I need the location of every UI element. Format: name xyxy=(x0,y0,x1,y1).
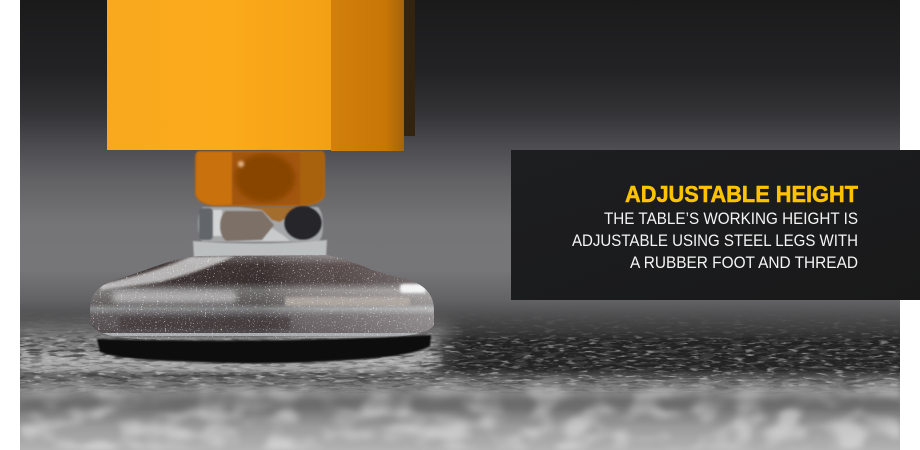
foot band dark lower left xyxy=(120,317,290,329)
table leg: yellow square tube xyxy=(107,0,415,151)
yellow tube front face xyxy=(107,0,331,150)
foot shoulder snow xyxy=(100,256,235,290)
body text xyxy=(572,210,858,272)
grey washer xyxy=(192,239,328,256)
foot rim highlight right xyxy=(285,297,410,306)
body text: THE TABLE’S WORKING HEIGHT IS xyxy=(604,210,858,228)
text panel xyxy=(511,150,920,300)
body text: A RUBBER FOOT AND THREAD xyxy=(630,254,858,272)
yellow tube side face xyxy=(331,0,404,151)
black rubber pad xyxy=(97,335,431,364)
lower steel hex nut xyxy=(198,206,323,242)
mat surface xyxy=(20,314,900,450)
dust on foot xyxy=(90,255,434,339)
steel foot base xyxy=(90,255,434,339)
foot rim highlight left xyxy=(112,291,237,303)
upper orange hex nut xyxy=(195,151,325,206)
sand line along pad xyxy=(20,356,420,372)
body text: ADJUSTABLE USING STEEL LEGS WITH xyxy=(572,232,858,250)
heading: ADJUSTABLE HEIGHT xyxy=(625,181,858,207)
